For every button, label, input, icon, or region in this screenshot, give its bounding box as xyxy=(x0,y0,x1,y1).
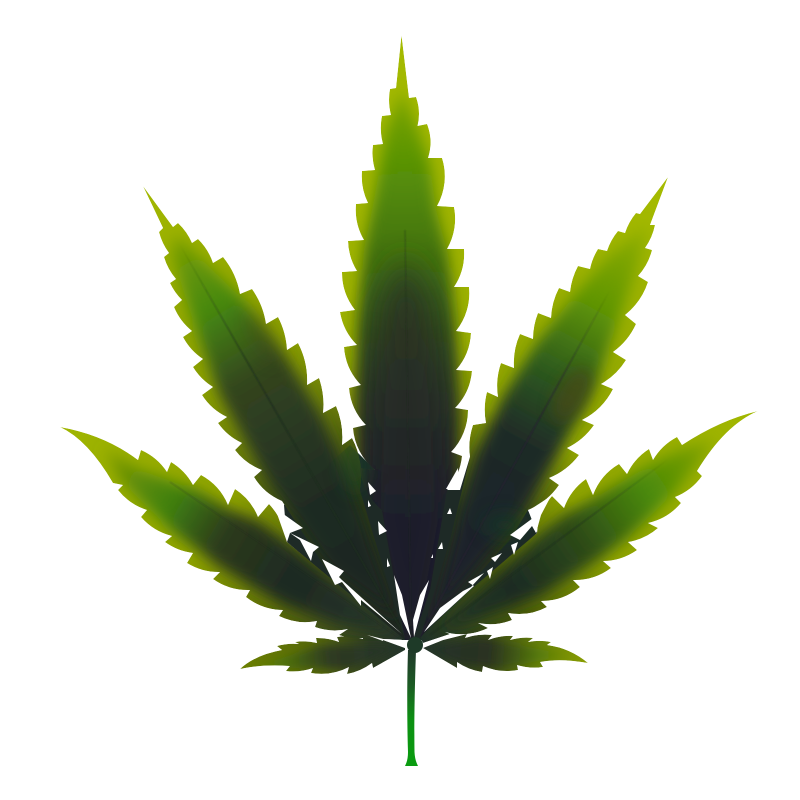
leaflet: lower right xyxy=(420,411,758,643)
leaflet: upper right xyxy=(420,177,668,638)
leaflet: upper left xyxy=(143,186,405,640)
leaflet: lower left xyxy=(60,427,405,640)
dark fan joining the leaflet bases xyxy=(284,445,537,640)
leaflet: small lower left xyxy=(240,636,405,674)
stem node xyxy=(407,637,423,653)
white gaps between leaflets xyxy=(275,468,551,644)
leaflet: center xyxy=(340,35,472,640)
illustration: cannabis leaf xyxy=(60,36,758,766)
dark green tints around the leaflet joins xyxy=(340,445,524,534)
leaflet: small lower right xyxy=(423,634,588,672)
leaf stem xyxy=(405,650,418,766)
